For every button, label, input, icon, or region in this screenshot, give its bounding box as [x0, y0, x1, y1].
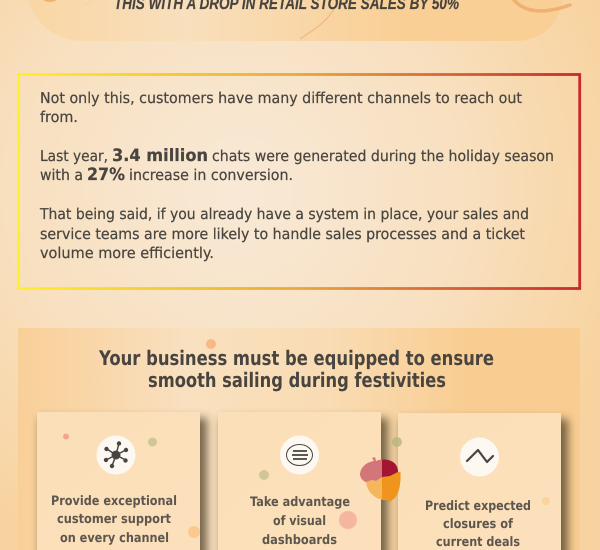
- heading: Your business must be equipped to ensure: [98, 346, 494, 370]
- card text: closures of: [443, 517, 513, 532]
- paragraph: chat stats: Last year,: [40, 147, 108, 165]
- paragraph: systems: That being said, if you already have a system in place, your sales and: [39, 205, 529, 223]
- icon: trend line: [460, 438, 499, 476]
- dot: between cards: [392, 437, 402, 447]
- card text: current deals: [436, 535, 520, 550]
- dot: heading: [206, 339, 216, 349]
- card text: [425, 499, 531, 550]
- dot: [542, 497, 550, 505]
- card text: Predict expected: [425, 499, 531, 514]
- paragraph: chat stats: 3.4 million: [112, 146, 208, 166]
- paragraph: systems: [39, 205, 529, 262]
- card text: [250, 495, 350, 548]
- top banner: [26, 0, 570, 41]
- heading: smooth sailing during festivities: [148, 368, 446, 392]
- card text: [51, 494, 177, 546]
- card: closures: [398, 413, 568, 550]
- card text: Provide exceptional: [51, 494, 177, 509]
- paragraph: chat stats: with a: [40, 166, 83, 184]
- decorative swirl: right: [514, 0, 570, 11]
- paragraph: channels: from.: [40, 108, 78, 126]
- heading: [98, 346, 494, 392]
- paragraph: chat stats: 27%: [87, 165, 125, 185]
- decorative swirl: left: [40, 0, 60, 2]
- decorative swirl: middle: [300, 2, 338, 39]
- card text: Take advantage: [250, 495, 350, 510]
- card text: on every channel: [60, 531, 169, 546]
- paragraph: systems: volume more efficiently.: [40, 244, 214, 262]
- paragraph: chat stats: increase in conversion.: [129, 166, 293, 184]
- card text: of visual: [273, 514, 326, 529]
- decorative swirl: faint left: [84, 0, 92, 5]
- paragraph: chat stats: [40, 146, 554, 185]
- icon: network: [96, 436, 136, 474]
- icon: acorn: [360, 457, 401, 503]
- paragraph: chat stats: chats were generated during the holiday season: [212, 147, 554, 165]
- card: customer support: [37, 412, 207, 550]
- dots: [63, 434, 69, 440]
- card: dashboards: [218, 412, 388, 550]
- paragraph: channels: Not only this, customers have many different channels to reach out: [40, 89, 522, 107]
- icon: list: [280, 436, 319, 474]
- paragraph: channels: [40, 89, 522, 126]
- callout box: [18, 74, 580, 288]
- dot: [259, 470, 269, 480]
- card text: customer support: [57, 512, 171, 527]
- paragraph: systems: service teams are more likely to handle sales processes and a ticket: [40, 225, 525, 243]
- card text: dashboards: [262, 533, 337, 548]
- panel: equipped: [18, 328, 580, 550]
